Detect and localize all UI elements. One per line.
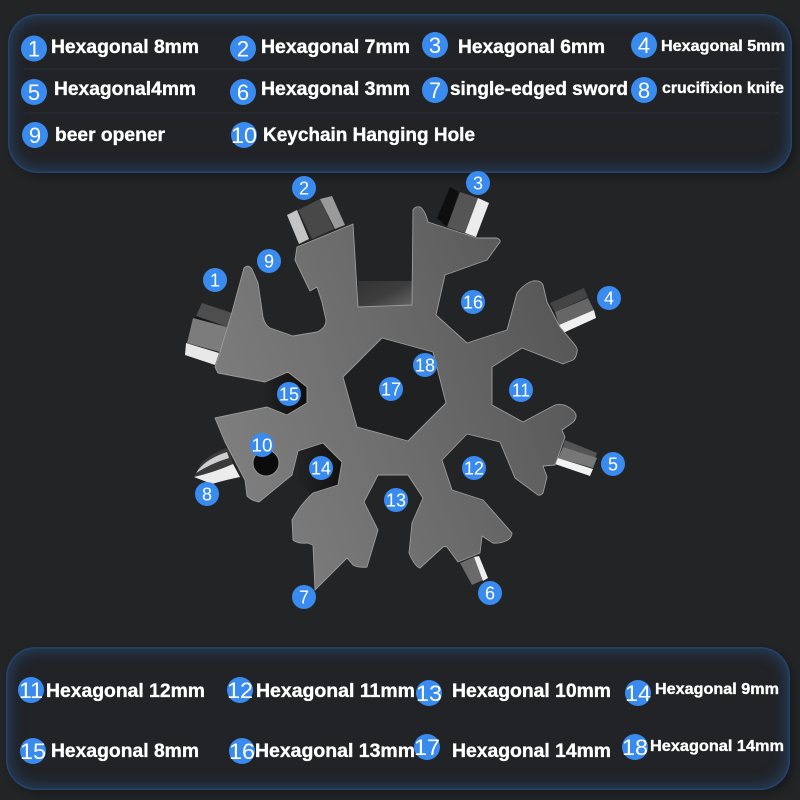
legend item 3	[422, 32, 605, 58]
legend item 13: 13	[416, 681, 442, 706]
legend item 3: 3	[429, 33, 441, 58]
legend item 10: 10	[231, 123, 257, 148]
badge 16	[461, 290, 485, 314]
legend item 11: 11	[19, 678, 43, 703]
bit 6	[460, 556, 488, 585]
legend item 16: Hexagonal 13mm	[255, 741, 415, 762]
legend item 16	[229, 738, 415, 764]
center cylinder	[358, 281, 412, 308]
legend item 12	[227, 677, 415, 703]
legend item 14	[625, 680, 779, 706]
badge 18: 18	[415, 356, 435, 376]
legend item 2: 2	[237, 36, 249, 62]
legend item 18: Hexagonal 14mm	[650, 738, 784, 755]
badge 6	[478, 581, 502, 605]
badge 4	[597, 286, 621, 310]
badge 1: 1	[210, 270, 220, 290]
badge 14: 14	[311, 458, 331, 478]
legend item 6: Hexagonal 3mm	[261, 79, 410, 100]
legend item 13: Hexagonal 10mm	[452, 681, 611, 702]
legend item 17: 17	[414, 735, 440, 760]
badge 12: 12	[464, 458, 484, 478]
legend item 11: Hexagonal 12mm	[46, 681, 205, 702]
legend item 4: Hexagonal 5mm	[661, 38, 785, 55]
badge 7	[292, 585, 316, 609]
badge 2: 2	[299, 178, 309, 198]
legend item 9: beer opener	[55, 125, 166, 146]
legend item 9: 9	[29, 123, 41, 148]
legend item 7: 7	[429, 78, 441, 103]
badge 8	[195, 482, 219, 506]
panel: bottom legend	[6, 647, 790, 790]
legend item 5: 5	[28, 80, 40, 105]
legend item 8	[631, 77, 784, 103]
badge 9: 9	[264, 252, 274, 272]
legend item 7: single-edged sword	[450, 79, 628, 100]
badge 7: 7	[299, 588, 309, 608]
legend item 14: Hexagonal 9mm	[655, 681, 779, 698]
legend item 18: 18	[622, 735, 648, 760]
legend item 5: Hexagonal4mm	[54, 79, 196, 100]
legend item 10: Keychain Hanging Hole	[263, 125, 475, 146]
badge 2	[292, 176, 316, 200]
legend item 9	[22, 122, 166, 148]
legend item 17	[414, 734, 611, 762]
legend item 12: 12	[227, 678, 253, 703]
badge 17	[379, 377, 403, 401]
legend item 18	[622, 734, 784, 760]
badge 1	[203, 268, 227, 292]
panel: top legend	[8, 14, 792, 173]
badge 5: 5	[608, 454, 618, 474]
legend item 14: 14	[625, 681, 651, 706]
legend item 8: 8	[638, 78, 650, 103]
legend item 4: 4	[638, 33, 650, 58]
legend item 2	[230, 36, 410, 62]
badge 15	[277, 382, 301, 406]
hole shadows	[252, 336, 448, 495]
legend item 16: 16	[229, 739, 255, 764]
badge 11: 11	[512, 380, 530, 400]
badge 4: 4	[604, 288, 614, 308]
legend item 1: 1	[28, 36, 40, 62]
badge 3: 3	[473, 174, 483, 194]
badge 12	[462, 456, 486, 480]
badge 3	[466, 171, 490, 195]
badge 10: 10	[252, 436, 272, 456]
badge 18	[413, 353, 437, 377]
legend item 17: Hexagonal 14mm	[452, 741, 611, 762]
badge 10	[250, 433, 274, 457]
legend item 4	[631, 32, 785, 58]
badge 13: 13	[386, 490, 406, 510]
badge 15: 15	[279, 384, 299, 404]
legend item 13	[416, 680, 611, 706]
bit 8: cross-head	[194, 448, 240, 484]
badge 14	[309, 456, 333, 480]
legend item 11	[18, 677, 205, 703]
bit 1	[185, 303, 232, 365]
legend item 12: Hexagonal 11mm	[256, 681, 415, 702]
legend item 1	[21, 36, 199, 62]
legend item 15: Hexagonal 8mm	[51, 741, 199, 762]
bit 2	[287, 196, 345, 244]
badge 13	[384, 488, 408, 512]
bit 3	[437, 187, 489, 237]
tool body	[215, 207, 577, 590]
legend item 5	[21, 79, 196, 105]
badge 5	[601, 452, 625, 476]
badge 16: 16	[463, 292, 483, 312]
legend item 15: 15	[20, 739, 46, 764]
bit 4	[550, 288, 596, 333]
legend item 8: crucifixion knife	[662, 80, 784, 97]
legend item 3: Hexagonal 6mm	[458, 37, 605, 58]
badge 9	[257, 249, 281, 273]
badge 6: 6	[485, 584, 495, 604]
badge 11	[509, 378, 533, 402]
legend item 7	[422, 77, 628, 103]
legend item 2: Hexagonal 7mm	[261, 37, 410, 58]
badge 8: 8	[202, 484, 212, 504]
badge 17: 17	[381, 380, 401, 400]
legend item 6	[230, 79, 410, 105]
bit 5	[555, 440, 597, 476]
legend item 6: 6	[237, 80, 249, 105]
legend item 15	[20, 738, 199, 764]
legend item 1: Hexagonal 8mm	[51, 37, 199, 58]
